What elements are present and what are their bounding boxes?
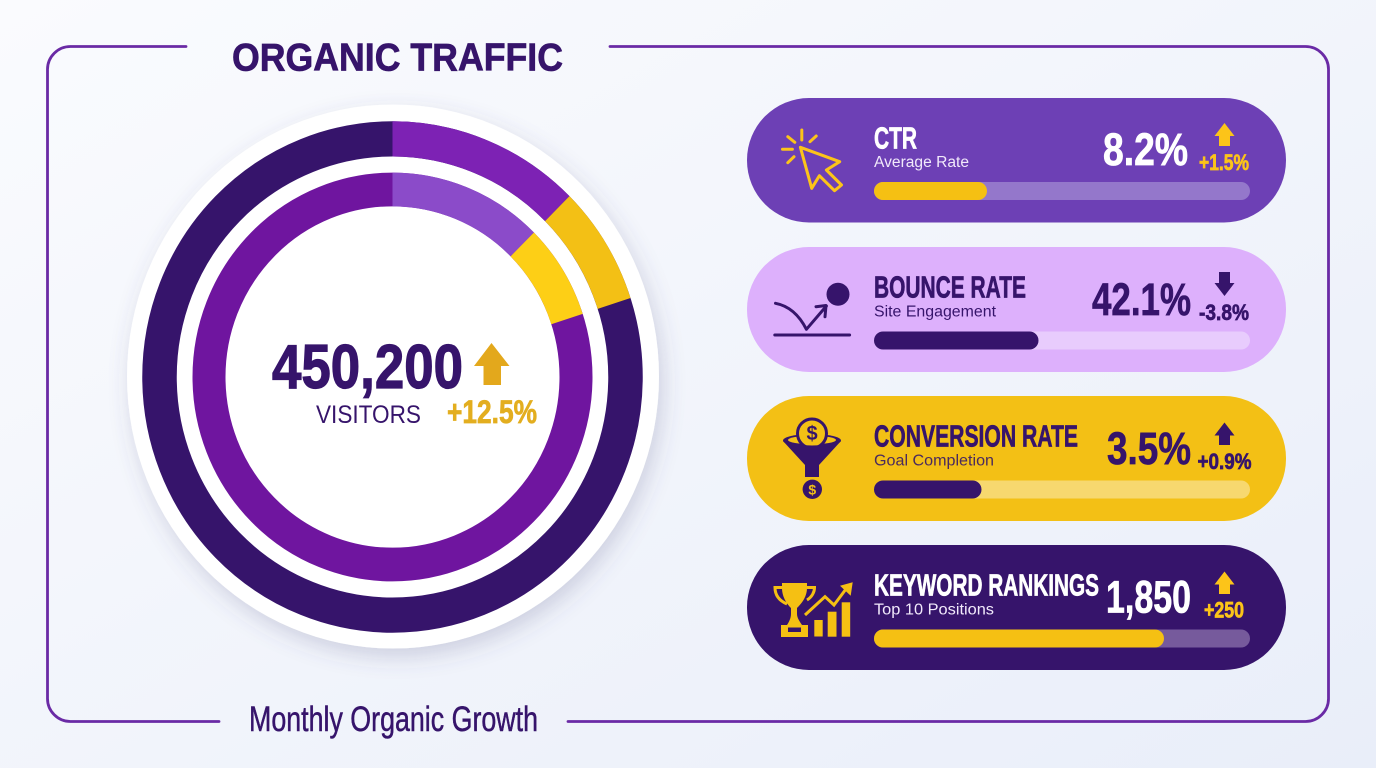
title: ORGANIC TRAFFIC	[232, 36, 563, 80]
value: 3.5%	[1107, 423, 1191, 474]
change: +0.9%	[1198, 449, 1252, 474]
heading: BOUNCE RATE	[874, 270, 1026, 304]
icon: funnel with coin	[783, 419, 841, 499]
icon: up arrow	[1214, 123, 1234, 146]
visitors change: +12.5%	[447, 394, 537, 430]
donut chart	[127, 104, 659, 648]
progress bar	[874, 182, 1250, 200]
icon: funnel with coin: $	[808, 482, 816, 498]
progress bar	[874, 480, 1250, 498]
icon: up arrow	[1214, 422, 1234, 445]
icon: cursor click	[782, 130, 842, 191]
icon: funnel with coin: $	[806, 423, 818, 445]
icon: down arrow	[1214, 272, 1234, 296]
panel: keyword rankings	[747, 545, 1286, 670]
change: +1.5%	[1199, 150, 1249, 175]
value: 1,850	[1106, 572, 1191, 622]
icon: bouncing ball	[775, 283, 850, 335]
change: -3.8%	[1199, 300, 1249, 325]
subheading: Site Engagement	[874, 304, 997, 320]
panel: conversion rate	[747, 396, 1286, 521]
value: 8.2%	[1103, 124, 1188, 175]
heading: CONVERSION RATE	[874, 418, 1078, 454]
subheading: Goal Completion	[874, 452, 994, 470]
visitors label: VISITORS	[316, 401, 421, 429]
icon: trophy and growth chart	[775, 582, 853, 637]
progress bar	[874, 332, 1250, 350]
change: +250	[1204, 598, 1244, 622]
white disc	[127, 104, 659, 648]
total visitors value: 450,200	[272, 333, 463, 402]
panel: CTR	[747, 98, 1286, 222]
subheading: Top 10 Positions	[874, 602, 994, 618]
icon: up arrow	[1214, 572, 1234, 594]
heading: CTR	[874, 120, 917, 156]
value: 42.1%	[1092, 274, 1191, 325]
footer caption: Monthly Organic Growth	[249, 700, 538, 739]
icon: up arrow	[474, 343, 510, 385]
subheading: Average Rate	[874, 154, 969, 171]
outer ring	[160, 139, 626, 615]
heading: KEYWORD RANKINGS	[874, 568, 1099, 602]
panel: bounce rate	[747, 247, 1286, 372]
progress bar	[874, 630, 1250, 648]
inner ring	[209, 189, 576, 565]
